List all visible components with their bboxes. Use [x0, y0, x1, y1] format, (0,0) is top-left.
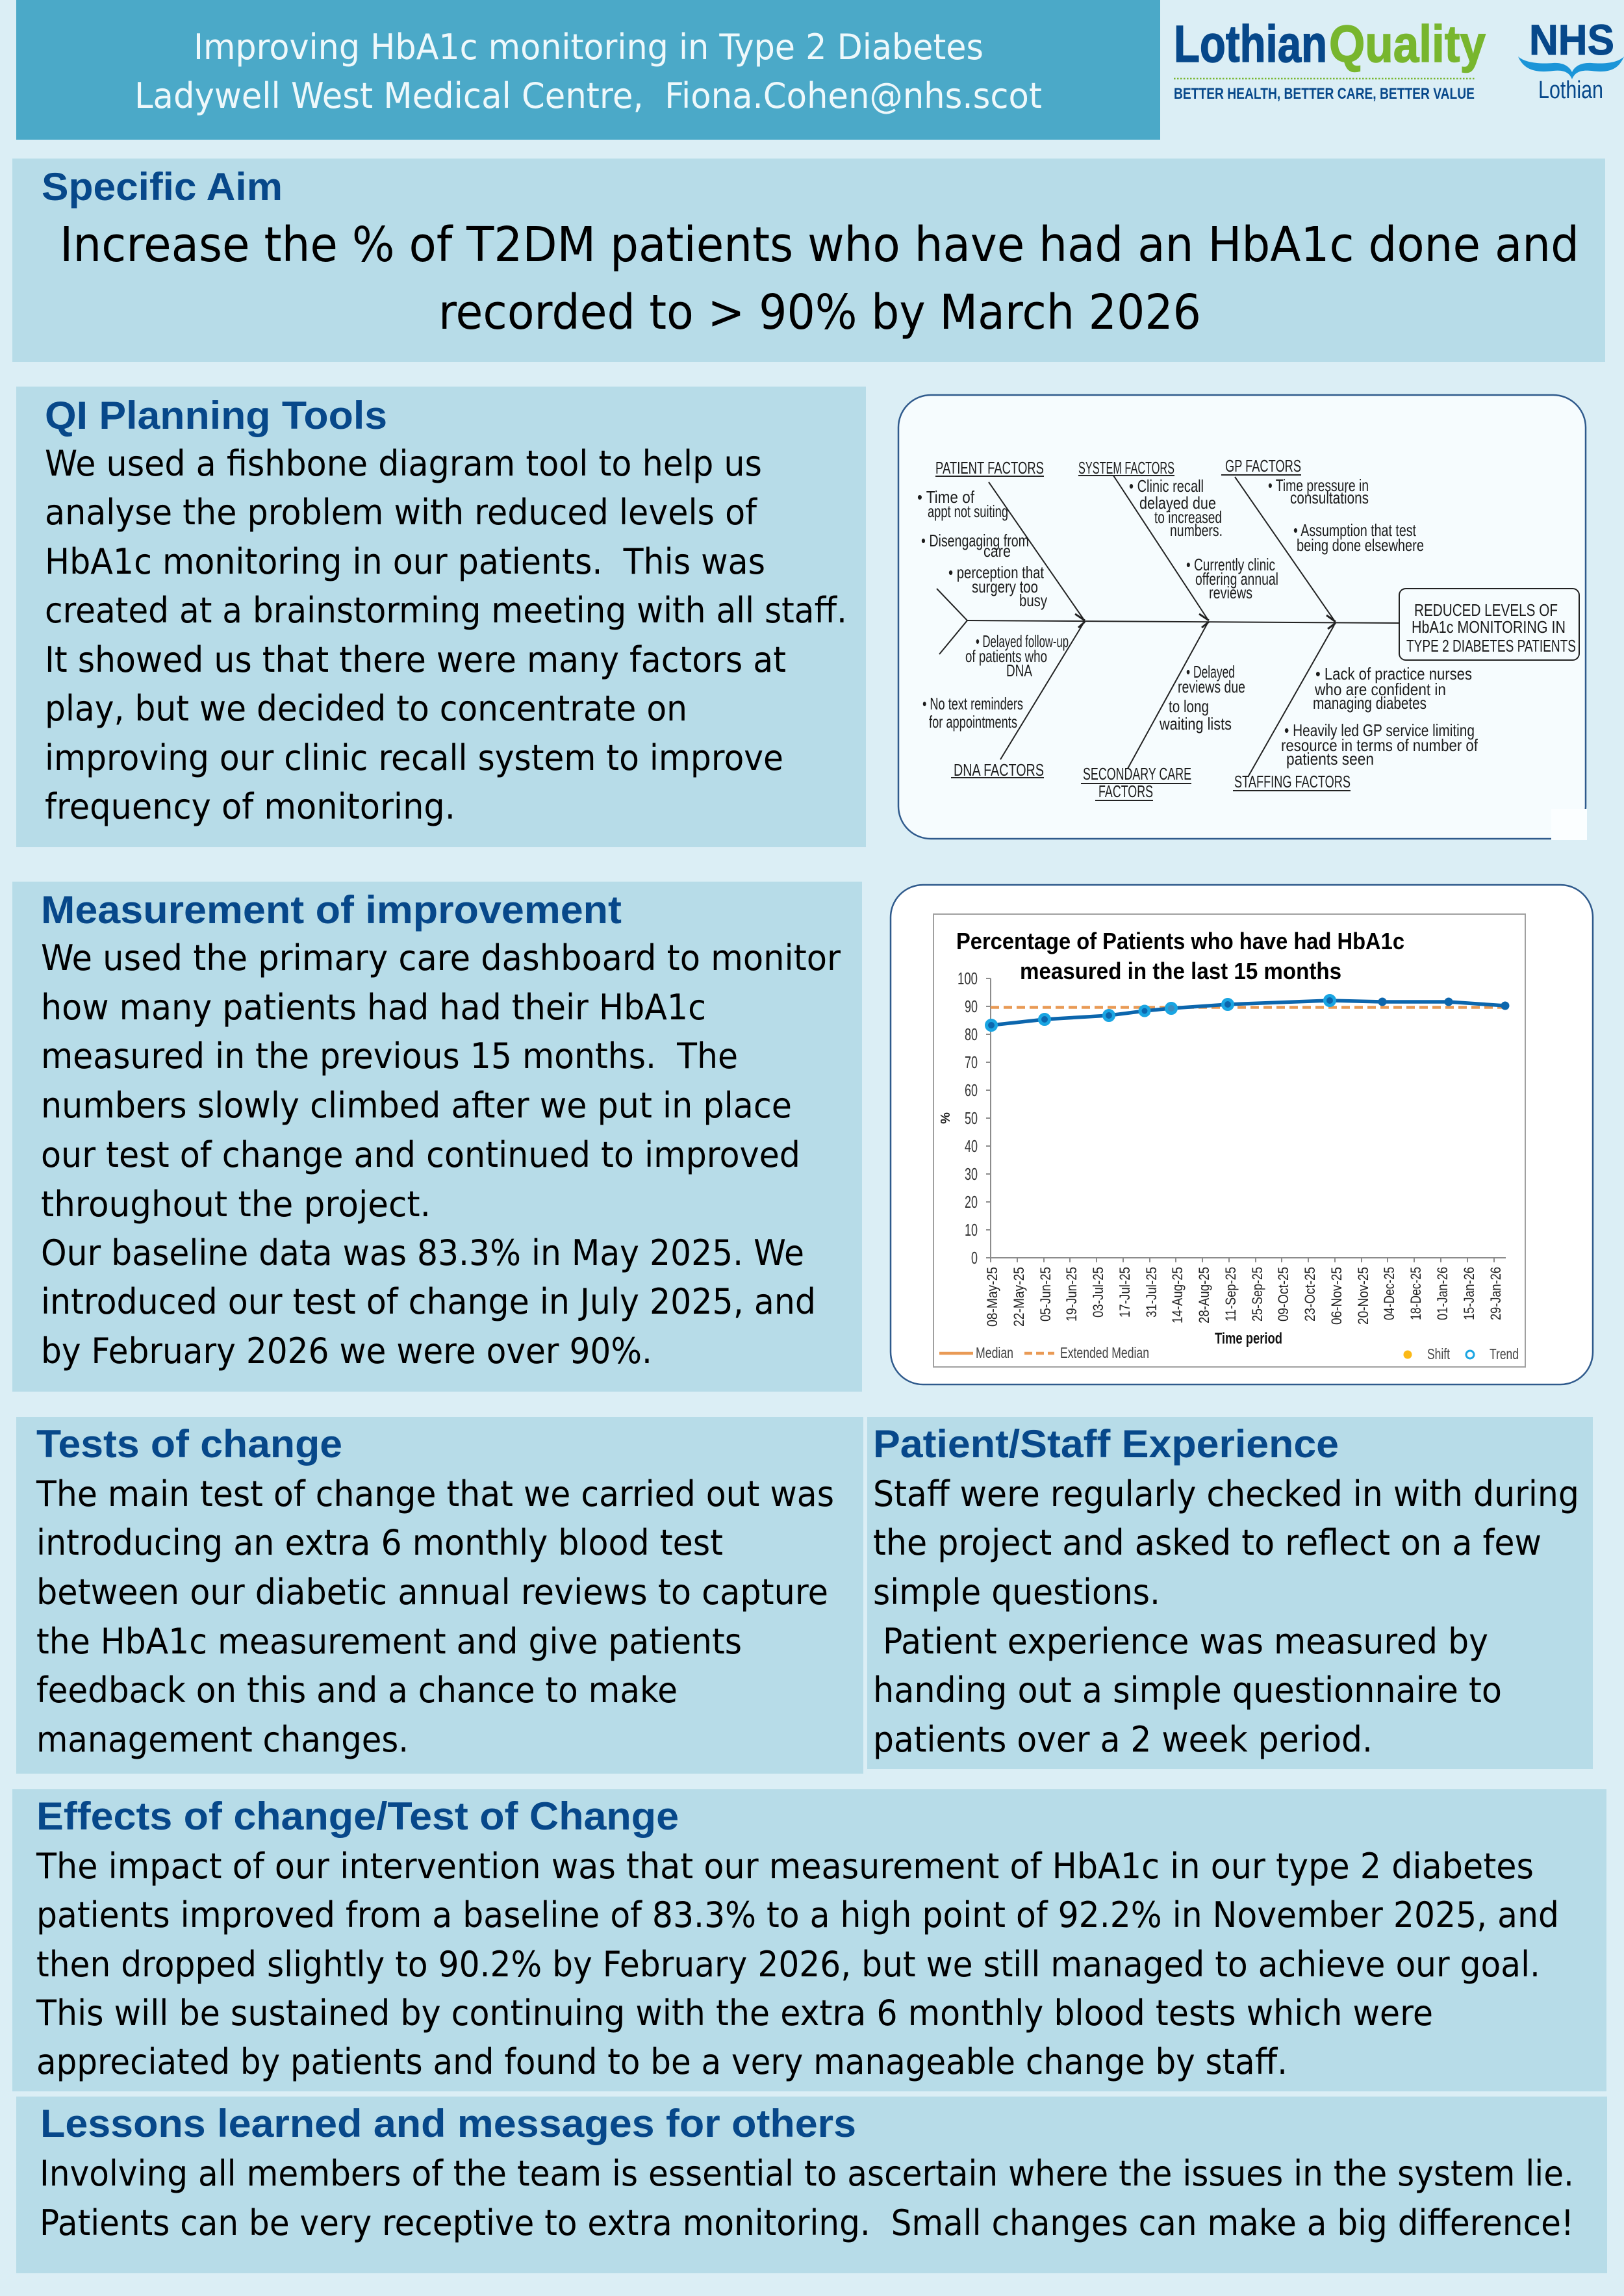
- x axis labels: 04-Dec-25: [1381, 1267, 1397, 1320]
- staffing factors: patients seen: [1286, 749, 1374, 769]
- chart legend: Median: [976, 1344, 1013, 1361]
- text block: experience description: Staff were regularly checked in with during: [873, 1473, 1579, 1514]
- GP factors: consultations: [1290, 488, 1369, 507]
- x axis labels: 23-Oct-25: [1302, 1267, 1318, 1321]
- staffing factors: who are confident in: [1314, 680, 1446, 699]
- text block: measurement description: by February 2026 we were over 90%.: [41, 1331, 652, 1371]
- text block: experience description: the project and asked to reflect on a few: [873, 1522, 1542, 1563]
- text block: measurement description: introduced our test of change in July 2025, and: [41, 1281, 816, 1322]
- chart legend: Shift: [1427, 1346, 1450, 1362]
- system factors: • Currently clinic: [1186, 555, 1275, 574]
- x axis title: Time period: [1215, 1330, 1282, 1347]
- patient factors: • Disengaging from: [921, 531, 1029, 550]
- patient factors: surgery too: [972, 577, 1038, 596]
- secondary care factors: • Delayed: [1186, 662, 1235, 682]
- title: Improving HbA1c monitoring in Type 2 Diabetes: [194, 27, 983, 68]
- x axis labels: 31-Jul-25: [1143, 1267, 1160, 1318]
- system factors: to increased: [1154, 507, 1222, 527]
- logo: NHS Lothian: NHS: [1529, 16, 1614, 64]
- text block: measurement description: Our baseline data was 83.3% in May 2025. We: [41, 1232, 804, 1273]
- panel: run chart: [891, 885, 1593, 1384]
- y axis labels: [958, 969, 978, 1268]
- chart legend: [939, 1344, 1519, 1362]
- staffing factors: • Heavily led GP service limiting: [1284, 721, 1475, 740]
- text block: tests of change description: feedback on this and a chance to make: [36, 1670, 678, 1711]
- system factors: numbers.: [1170, 520, 1223, 540]
- system factors: reviews: [1209, 583, 1252, 602]
- GP factors: • Assumption that test: [1293, 520, 1417, 540]
- heading: specific aim: Specific Aim: [42, 165, 283, 209]
- logo: Lothian Quality: BETTER HEALTH, BETTER CARE, BETTER VALUE: [1174, 85, 1475, 103]
- staffing factors: • Lack of practice nurses: [1315, 664, 1472, 683]
- text block: measurement description: how many patients had had their HbA1c: [41, 987, 706, 1028]
- chart legend: Trend: [1490, 1346, 1519, 1362]
- y axis labels: 100: [958, 969, 978, 988]
- staffing factors: managing diabetes: [1313, 693, 1427, 713]
- x axis labels: 17-Jul-25: [1117, 1267, 1133, 1318]
- staffing factors: STAFFING FACTORS: [1234, 772, 1351, 791]
- y axis labels: 20: [965, 1192, 978, 1212]
- text block: experience description: patients over a 2 week period.: [873, 1719, 1373, 1760]
- extended median line: [991, 1006, 1506, 1009]
- panel: lessons learned: [16, 2097, 1607, 2273]
- text block: experience description: handing out a simple questionnaire to: [873, 1670, 1502, 1711]
- text block: tests of change description: introducing an extra 6 monthly blood test: [36, 1522, 723, 1563]
- text block: QI planning description: [45, 443, 847, 827]
- text block: effects description: then dropped slightly to 90.2% by February 2026, but we still managed to achieve our goal.: [36, 1944, 1540, 1985]
- text block: measurement description: [41, 938, 841, 1371]
- GP factors: GP FACTORS: [1225, 456, 1301, 476]
- aim statement: [60, 217, 1579, 340]
- author and contact: Ladywell West Medical Centre, Fiona.Cohen@nhs.scot: [134, 75, 1042, 116]
- patient factors: • perception that: [948, 563, 1045, 582]
- x axis labels: 11-Sep-25: [1223, 1267, 1239, 1321]
- chart axes: [986, 978, 1506, 1262]
- x axis labels: 01-Jan-26: [1434, 1267, 1451, 1320]
- text block: QI planning description: improving our clinic recall system to improve: [45, 737, 783, 778]
- fishbone effect box: REDUCED LEVELS OF: [1414, 600, 1558, 620]
- system factors: SYSTEM FACTORS: [1078, 458, 1174, 478]
- x axis labels: 25-Sep-25: [1249, 1267, 1265, 1321]
- patient factors: care: [983, 541, 1011, 561]
- heading: effects of change: Effects of change/Test of Change: [36, 1794, 679, 1838]
- text block: tests of change description: management changes.: [36, 1719, 409, 1760]
- GP factors: being done elsewhere: [1297, 535, 1424, 555]
- x axis labels: 19-Jun-25: [1063, 1267, 1080, 1321]
- text block: QI planning description: HbA1c monitoring in our patients. This was: [45, 541, 765, 582]
- GP factors: [1225, 456, 1424, 555]
- text block: experience description: [873, 1473, 1579, 1760]
- text block: QI planning description: It showed us that there were many factors at: [45, 639, 786, 680]
- system factors: offering annual: [1195, 569, 1278, 589]
- patient factors: appt not suiting: [928, 502, 1008, 521]
- text block: tests of change description: The main test of change that we carried out was: [36, 1473, 834, 1514]
- patient factors: • Time of: [917, 487, 975, 507]
- x axis labels: 08-May-25: [984, 1267, 1000, 1327]
- patient factors: [917, 458, 1047, 610]
- y axis labels: 90: [965, 997, 978, 1016]
- text block: experience description: simple questions.: [873, 1572, 1160, 1613]
- text block: effects description: [36, 1846, 1559, 2082]
- fishbone effect box: [1399, 589, 1579, 660]
- panel: QI planning tools: [16, 387, 866, 847]
- heading: patient/staff experience: Patient/Staff Experience: [873, 1422, 1339, 1466]
- logo: NHS Lothian: [1518, 16, 1624, 104]
- y axis labels: 40: [965, 1136, 978, 1156]
- aim statement: recorded to > 90% by March 2026: [438, 285, 1201, 340]
- x axis labels: 15-Jan-26: [1461, 1267, 1477, 1320]
- x axis labels: 18-Dec-25: [1408, 1267, 1424, 1320]
- panel: measurement of improvement: [12, 882, 862, 1392]
- secondary care factors: to long: [1169, 696, 1209, 716]
- text block: effects description: appreciated by patients and found to be a very manageable change by staff.: [36, 2041, 1288, 2082]
- fishbone skeleton: [935, 475, 1399, 800]
- DNA factors: • No text reminders: [922, 694, 1023, 713]
- heading: tests of change: Tests of change: [36, 1422, 342, 1466]
- chart legend: Extended Median: [1060, 1344, 1149, 1361]
- fishbone effect box: HbA1c MONITORING IN: [1412, 617, 1566, 637]
- DNA factors: for appointments: [929, 712, 1017, 732]
- logo: Lothian Quality: Quality: [1329, 15, 1486, 73]
- logo: Lothian Quality: [1174, 15, 1486, 103]
- y axis title: %: [939, 1112, 953, 1124]
- x axis labels: 09-Oct-25: [1275, 1267, 1291, 1321]
- panel: fishbone diagram: [898, 395, 1587, 840]
- chart title: [956, 928, 1404, 984]
- staffing factors: [1234, 664, 1478, 791]
- heading: lessons learned: Lessons learned and messages for others: [40, 2102, 856, 2145]
- panel: tests of change: [16, 1417, 863, 1774]
- DNA factors: [922, 631, 1069, 780]
- x axis labels: [984, 1267, 1504, 1327]
- heading: QI planning tools: QI Planning Tools: [45, 394, 387, 437]
- y axis labels: 30: [965, 1164, 978, 1184]
- system factors: • Clinic recall: [1129, 476, 1204, 496]
- x axis labels: 20-Nov-25: [1355, 1267, 1371, 1325]
- y axis labels: 80: [965, 1025, 978, 1044]
- x axis labels: 05-Jun-25: [1037, 1267, 1054, 1321]
- secondary care factors: reviews due: [1178, 677, 1245, 696]
- x axis labels: 14-Aug-25: [1169, 1267, 1186, 1323]
- text block: QI planning description: We used a fishbone diagram tool to help us: [45, 443, 762, 484]
- DNA factors: DNA FACTORS: [954, 760, 1044, 780]
- y axis labels: 70: [965, 1052, 978, 1072]
- x axis labels: 22-May-25: [1011, 1267, 1027, 1327]
- text block: measurement description: We used the primary care dashboard to monitor: [41, 938, 841, 978]
- text block: QI planning description: frequency of monitoring.: [45, 786, 455, 827]
- DNA factors: of patients who: [965, 646, 1047, 666]
- text block: tests of change description: between our diabetic annual reviews to capture: [36, 1572, 828, 1613]
- panel: specific aim: [12, 159, 1605, 362]
- text block: tests of change description: the HbA1c measurement and give patients: [36, 1621, 742, 1662]
- secondary care factors: waiting lists: [1159, 714, 1232, 733]
- logo: NHS Lothian: Lothian: [1538, 77, 1603, 104]
- text block: experience description: Patient experience was measured by: [883, 1621, 1488, 1662]
- y axis labels: 50: [965, 1108, 978, 1128]
- text block: measurement description: our test of change and continued to improved: [41, 1134, 800, 1175]
- x axis labels: 29-Jan-26: [1488, 1267, 1504, 1320]
- heading: measurement of improvement: Measurement of improvement: [41, 888, 622, 932]
- data line with markers: [986, 995, 1510, 1030]
- x axis labels: 03-Jul-25: [1090, 1267, 1106, 1318]
- text block: lessons description: [40, 2153, 1574, 2243]
- patient factors: PATIENT FACTORS: [935, 458, 1044, 478]
- text block: effects description: This will be sustained by continuing with the extra 6 monthly blood tests which were: [36, 1993, 1433, 2034]
- system factors: [1078, 458, 1278, 602]
- x axis labels: 28-Aug-25: [1196, 1267, 1212, 1323]
- y axis labels: 10: [965, 1220, 978, 1240]
- chart title: measured in the last 15 months: [1020, 958, 1341, 984]
- text block: QI planning description: analyse the problem with reduced levels of: [45, 492, 758, 533]
- y axis labels: 60: [965, 1080, 978, 1100]
- patient factors: busy: [1019, 591, 1047, 610]
- DNA factors: DNA: [1006, 661, 1032, 680]
- text block: QI planning description: created at a brainstorming meeting with all staff.: [45, 590, 847, 631]
- text block: measurement description: measured in the previous 15 months. The: [41, 1036, 738, 1077]
- GP factors: • Time pressure in: [1268, 476, 1369, 495]
- secondary care factors: [1083, 662, 1245, 801]
- panel: effects of change: [12, 1789, 1606, 2091]
- text block: measurement description: numbers slowly climbed after we put in place: [41, 1085, 792, 1126]
- text block: effects description: The impact of our intervention was that our measurement of HbA1c in our type 2 diabetes: [36, 1846, 1534, 1887]
- DNA factors: • Delayed follow-up: [976, 631, 1069, 651]
- logo: Lothian Quality: Lothian: [1174, 15, 1327, 73]
- panel: patient and staff experience: [867, 1417, 1593, 1769]
- text block: measurement description: throughout the project.: [41, 1184, 431, 1225]
- x axis labels: 06-Nov-25: [1328, 1267, 1345, 1325]
- header banner: [16, 0, 1160, 140]
- staffing factors: resource in terms of number of: [1281, 735, 1478, 755]
- system factors: delayed due: [1139, 493, 1216, 513]
- text block: effects description: patients improved from a baseline of 83.3% to a high point of 92.2% in November 2025, and: [36, 1894, 1559, 1935]
- text block: QI planning description: play, but we decided to concentrate on: [45, 688, 687, 729]
- text block: tests of change description: [36, 1473, 834, 1760]
- secondary care factors: SECONDARY CARE: [1083, 764, 1191, 784]
- chart title: Percentage of Patients who have had HbA1c: [956, 928, 1404, 954]
- secondary care factors: FACTORS: [1098, 782, 1153, 801]
- y axis labels: 0: [971, 1248, 978, 1268]
